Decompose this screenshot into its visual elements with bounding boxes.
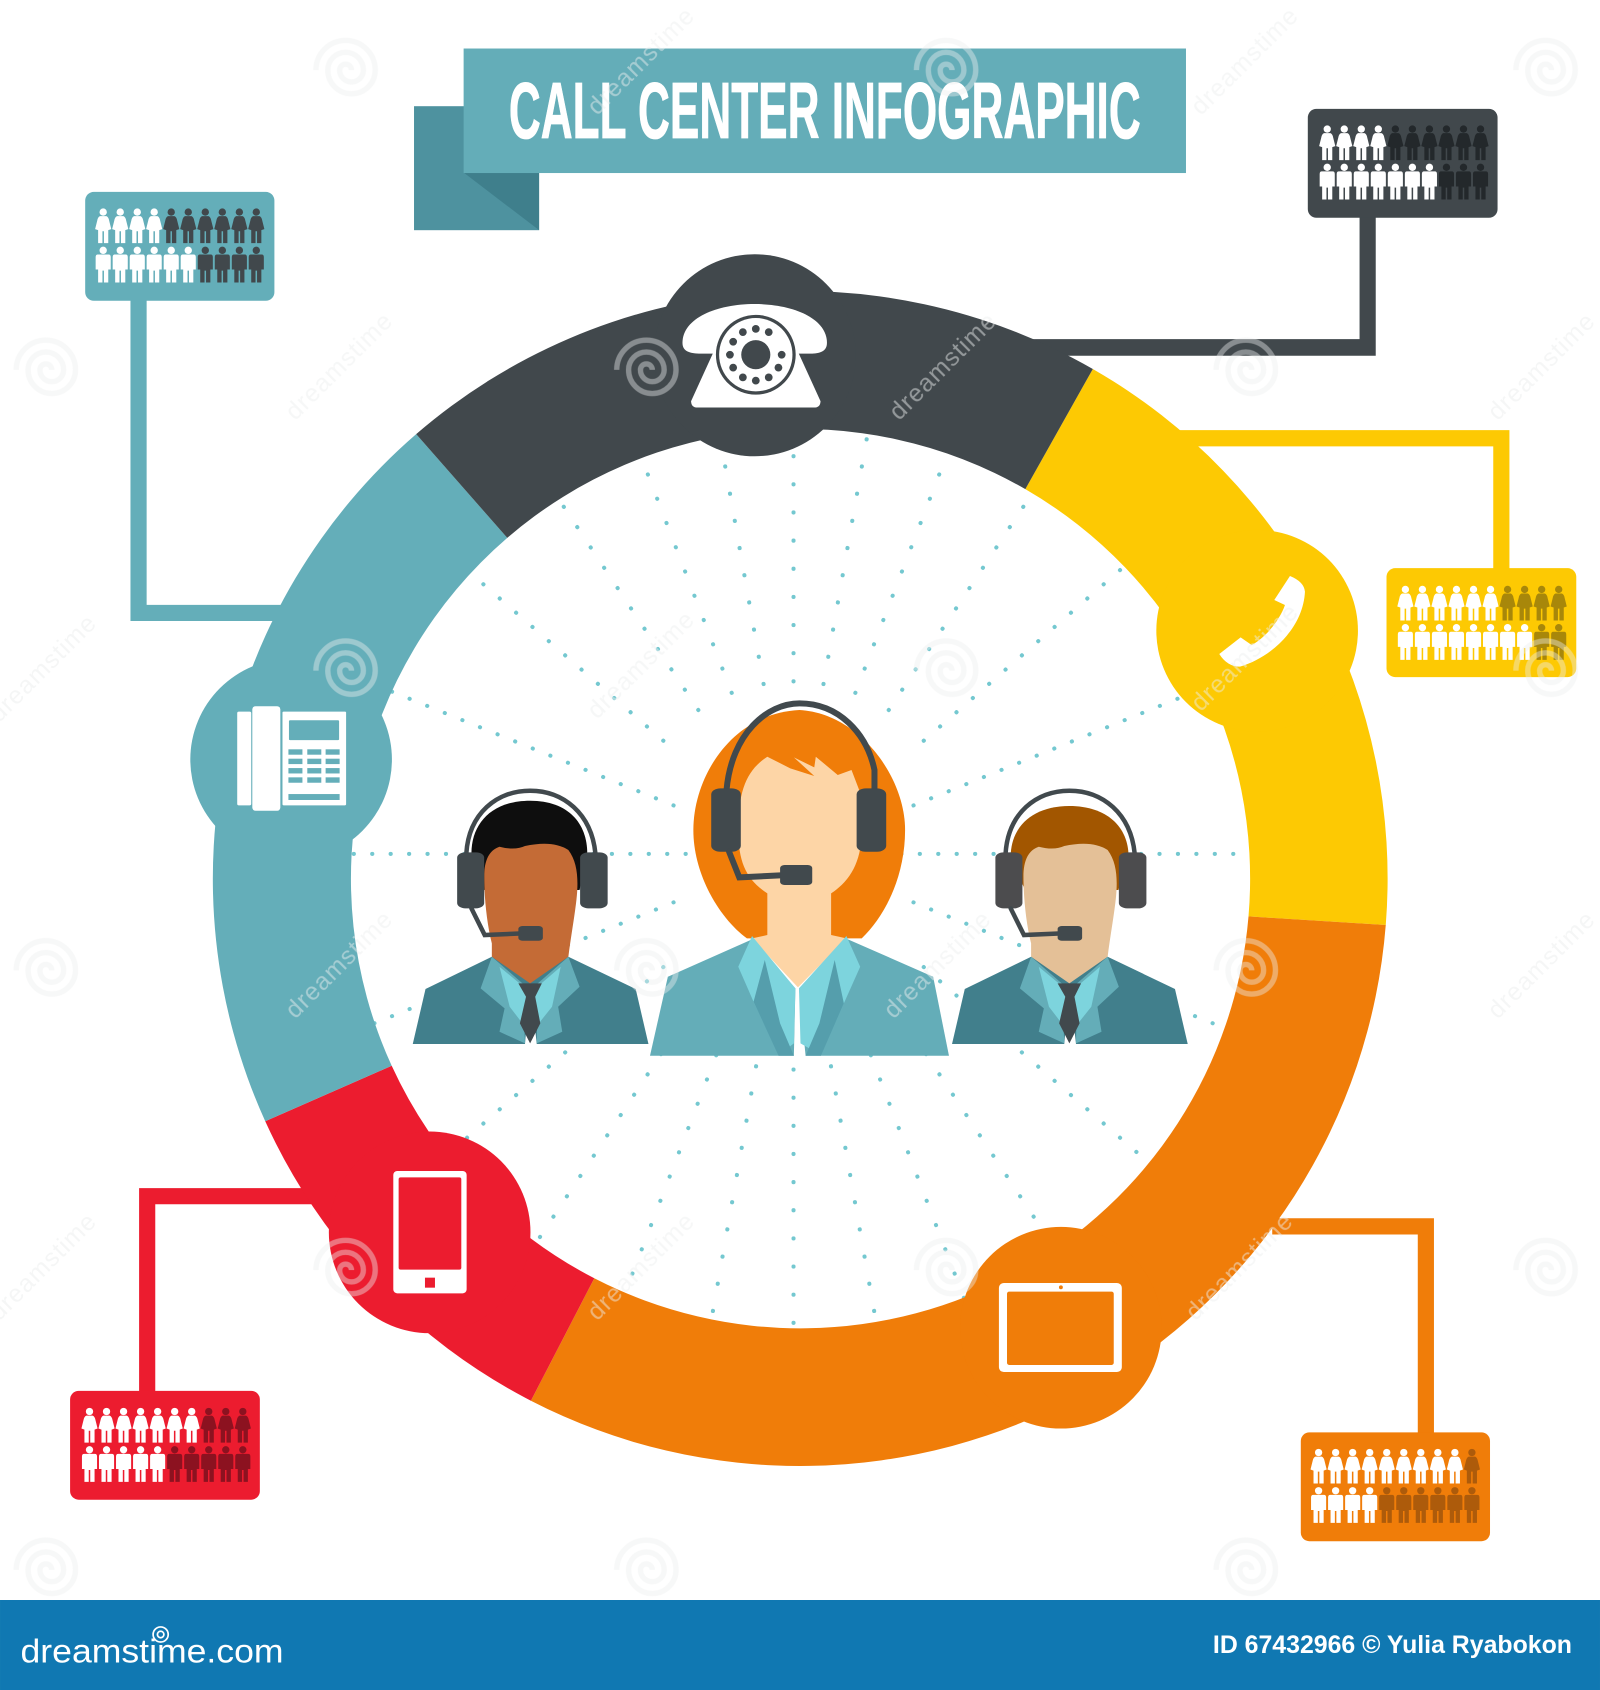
watermark text: dreamstime bbox=[582, 1208, 701, 1326]
ring: blue segment bbox=[190, 434, 507, 1121]
footer bar bbox=[0, 1600, 1600, 1690]
radial dotted lines bbox=[314, 374, 1273, 1334]
connector: dark bbox=[1024, 210, 1376, 356]
watermark text: dreamstime bbox=[281, 906, 399, 1024]
footer logo text: dreamstime.com bbox=[20, 1634, 284, 1671]
icon: tablet bbox=[999, 1283, 1122, 1372]
watermark text: dreamstime bbox=[281, 308, 399, 426]
icon: phone handset bbox=[1219, 576, 1305, 667]
agent: left man bbox=[413, 791, 648, 1044]
connector: blue bbox=[130, 291, 291, 621]
ring: orange segment bbox=[531, 916, 1386, 1466]
watermark text: dreamstime bbox=[1186, 2, 1304, 121]
watermark text bbox=[0, 2, 1600, 1326]
watermark text: dreamstime bbox=[1483, 906, 1600, 1024]
connector: yellow bbox=[1175, 430, 1509, 577]
title ribbon fold bbox=[414, 106, 539, 230]
ring: yellow segment bbox=[1025, 369, 1388, 925]
icon: smartphone bbox=[393, 1171, 467, 1293]
watermark text: dreamstime bbox=[1483, 308, 1600, 426]
connector: red bbox=[139, 1188, 318, 1396]
people box: red bbox=[70, 1391, 260, 1500]
watermark text: dreamstime bbox=[884, 308, 1003, 426]
watermark text: dreamstime bbox=[1186, 599, 1304, 717]
agent: centre woman bbox=[650, 703, 949, 1056]
people box: blue bbox=[85, 192, 274, 301]
watermark text: dreamstime bbox=[879, 906, 997, 1024]
agents group bbox=[413, 703, 1188, 1056]
title banner bbox=[464, 49, 1186, 173]
icon: desk phone bbox=[237, 706, 346, 811]
footer credit: ID 67432966 © Yulia Ryabokon bbox=[1213, 1632, 1572, 1659]
footer logo swirl bbox=[153, 1627, 168, 1642]
ring: red segment bbox=[265, 1066, 594, 1401]
ring: dark segment bbox=[416, 254, 1093, 538]
people box: yellow bbox=[1387, 568, 1576, 677]
watermark text: dreamstime bbox=[582, 606, 701, 724]
icon: rotary telephone bbox=[682, 304, 827, 408]
watermark text: dreamstime bbox=[582, 2, 701, 121]
people box: orange bbox=[1301, 1432, 1490, 1541]
people box: dark bbox=[1308, 109, 1498, 218]
agent: right man bbox=[952, 791, 1188, 1044]
watermark text: dreamstime bbox=[1181, 1208, 1299, 1326]
connector: orange bbox=[1272, 1218, 1434, 1439]
